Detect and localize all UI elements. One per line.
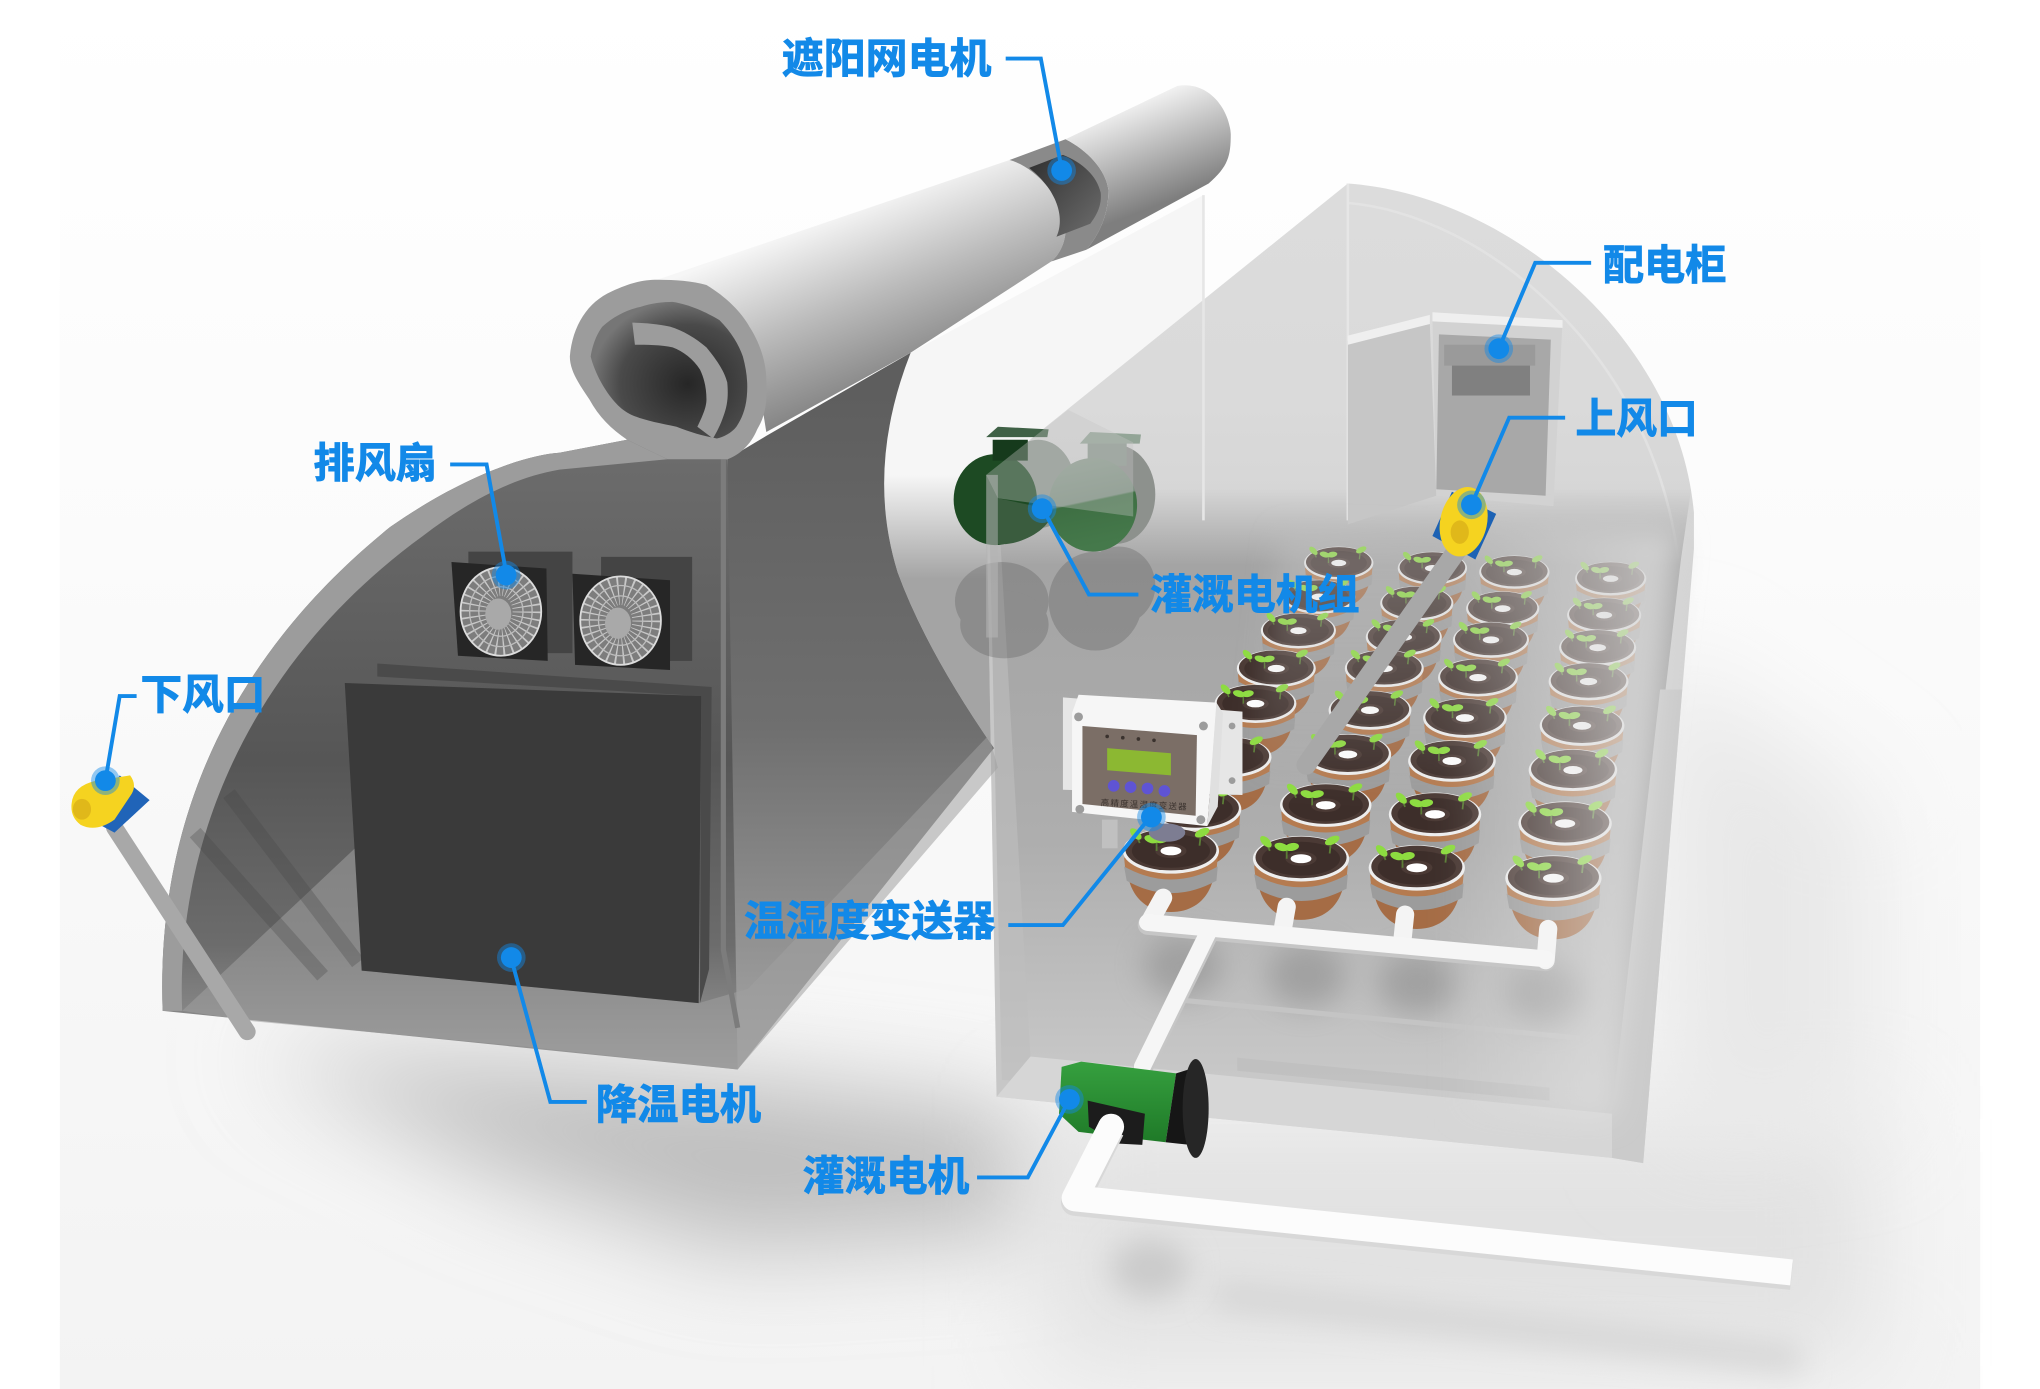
arch ring xyxy=(162,440,667,1011)
callout: distribution cabinet xyxy=(1484,242,1726,363)
callout: upper vent: 上风口 xyxy=(1576,395,1698,442)
right motor fins xyxy=(1077,445,1155,544)
lower vent motor xyxy=(71,775,150,833)
humidity probe xyxy=(1102,820,1118,848)
callout: lower vent: 下风口 xyxy=(141,671,265,718)
callout: irrigation motor xyxy=(803,1085,1084,1199)
callout: distribution cabinet: 配电柜 xyxy=(1603,242,1726,289)
upper vent motor xyxy=(1432,482,1496,561)
wall edge xyxy=(723,459,738,1028)
greenhouse floor xyxy=(989,488,1691,1132)
corner post xyxy=(986,475,998,638)
shade net roller xyxy=(570,85,1231,459)
motor gap end face xyxy=(1010,139,1108,262)
exhaust fan 1 xyxy=(461,567,541,656)
transmitter face xyxy=(1082,726,1197,816)
callout: lower vent xyxy=(91,671,265,795)
upper vent rod xyxy=(1306,546,1460,765)
right pump motor xyxy=(1049,458,1137,552)
supply pipe xyxy=(1075,1114,1792,1276)
roller tube front xyxy=(657,160,1066,432)
rear arch opening xyxy=(884,195,1203,748)
front left post xyxy=(986,475,1030,1097)
callout: irrigation motor group xyxy=(1028,494,1360,618)
left motor fins xyxy=(1002,440,1075,528)
floor glow xyxy=(182,735,998,1069)
callout: cooling motor xyxy=(497,943,761,1128)
irrigation motor group xyxy=(954,410,1155,658)
side wall xyxy=(721,353,994,1069)
electrical cabinet xyxy=(1348,312,1563,524)
irrigation motor xyxy=(1059,1059,1209,1158)
lower vent rod xyxy=(114,827,247,1032)
callout: irrigation motor group: 灌溉电机组 xyxy=(1150,571,1360,618)
callout: temperature humidity transmitter xyxy=(744,803,1166,944)
callout: cooling motor: 降温电机 xyxy=(596,1081,761,1128)
callout: exhaust fan: 排风扇 xyxy=(314,439,437,486)
floor strips xyxy=(1237,1058,1550,1101)
callout: temperature humidity transmitter: 温湿度变送器 xyxy=(744,897,996,944)
irrigation manifold pipes xyxy=(1142,898,1548,1069)
tube motor drum xyxy=(1029,155,1101,237)
cooling pad xyxy=(345,664,712,1003)
callout: shade net motor: 遮阳网电机 xyxy=(782,35,992,82)
roller inner hollow xyxy=(591,302,747,438)
transmitter buttons xyxy=(1108,780,1170,797)
floor shadow xyxy=(247,651,1873,1373)
callout: exhaust fan xyxy=(314,439,520,589)
left pump motor xyxy=(954,454,1037,545)
reflection of motors xyxy=(955,546,1155,658)
roller spiral xyxy=(632,323,728,438)
roller end ring xyxy=(570,280,767,459)
haze over pots xyxy=(1249,520,1678,1119)
exhaust fan 2 xyxy=(580,576,661,665)
callout: irrigation motor: 灌溉电机 xyxy=(803,1152,970,1199)
pump glass overlay xyxy=(986,410,1133,517)
left greenhouse xyxy=(162,353,998,1069)
right greenhouse glass shell xyxy=(884,183,1694,1163)
transmitter display xyxy=(1107,748,1171,775)
front sill xyxy=(997,1056,1612,1158)
status leds xyxy=(1105,735,1156,742)
pot reflections on floor xyxy=(1144,935,1586,1024)
inner arch line xyxy=(1348,203,1678,559)
callout: upper vent xyxy=(1457,395,1698,519)
transmitter caption: 高精度温湿度变送器 xyxy=(1101,797,1187,812)
roller tube back xyxy=(1066,85,1231,250)
plant pots xyxy=(1123,545,1646,939)
left motor front green xyxy=(998,498,1054,544)
callout: shade net motor xyxy=(782,35,1076,185)
mounting flange xyxy=(1063,697,1242,795)
fan boxes xyxy=(451,552,692,670)
temperature and humidity transmitter xyxy=(1063,695,1242,848)
roof and walls xyxy=(986,183,1694,1163)
braces inside arch xyxy=(195,794,358,976)
enclosure xyxy=(1072,695,1216,826)
